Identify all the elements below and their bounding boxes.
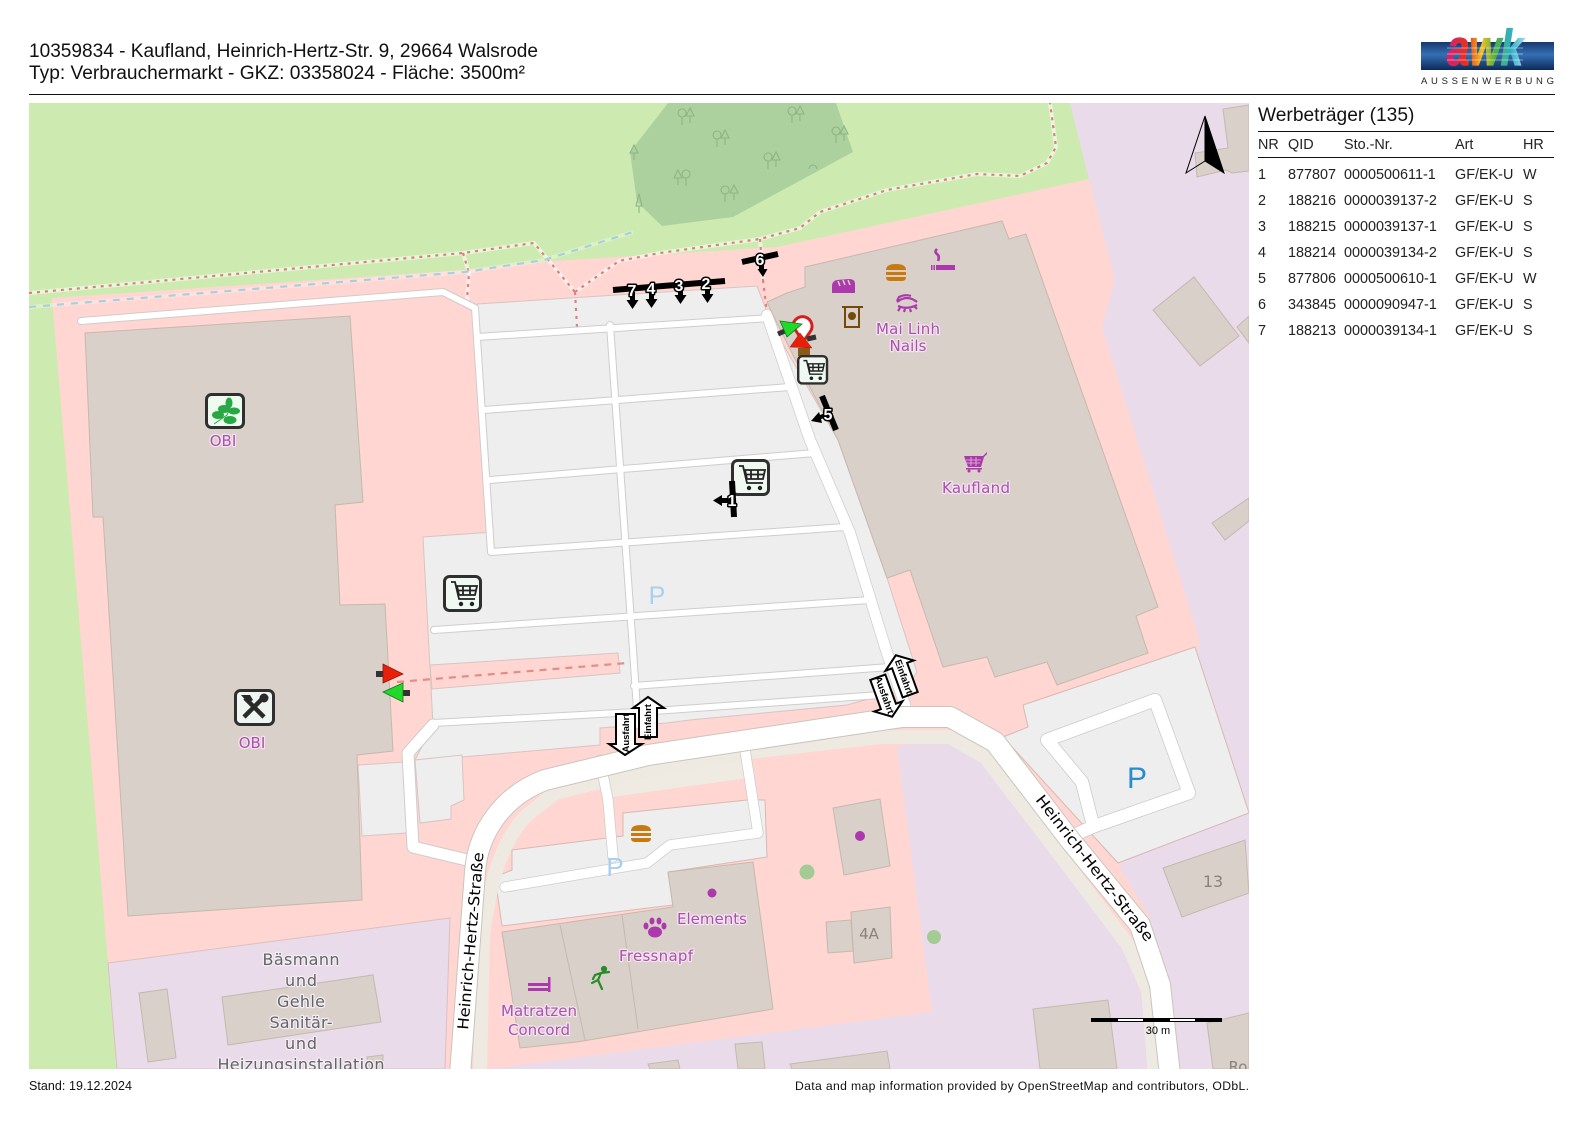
row 6: 343845 — [1288, 297, 1336, 313]
pin — [793, 317, 812, 342]
footer: date: Stand: 19.12.2024 — [29, 1079, 132, 1093]
icon: garden marker OBI — [206, 394, 244, 428]
labels: OSM places: Bäsmann — [262, 950, 340, 969]
row 1: 1 — [1258, 167, 1266, 183]
green grass area north — [29, 103, 1089, 300]
main road — [460, 717, 1170, 1075]
legend header row: Art — [1455, 137, 1473, 153]
arrow: Ausfahrt south: Ausfahrt — [621, 713, 632, 753]
row 2: S — [1523, 193, 1533, 209]
icon: bread — [832, 279, 855, 293]
building: Kaufland — [767, 221, 1158, 685]
marker 1 — [713, 481, 737, 517]
icon: runner — [592, 967, 609, 989]
row 6 — [1258, 297, 1533, 313]
icon: ATM — [842, 307, 863, 327]
row 7: 188213 — [1288, 323, 1336, 339]
icon: cart marker small — [798, 356, 827, 383]
row 1: GF/EK-U — [1455, 167, 1513, 183]
marker 5: 5 — [824, 407, 833, 424]
row 2: 2 — [1258, 193, 1266, 209]
row 4: 4 — [1258, 245, 1266, 261]
row 1: W — [1523, 167, 1537, 183]
row 4: 188214 — [1288, 245, 1336, 261]
marker 5 — [811, 396, 836, 430]
row 3: 188215 — [1288, 219, 1336, 235]
labels: OSM places: Matratzen — [501, 1002, 577, 1020]
row 6: S — [1523, 297, 1533, 313]
arrow: Ausfahrt east: Ausfahrt — [872, 675, 896, 716]
lavender area southwest — [108, 918, 450, 1069]
row 5 — [1258, 271, 1537, 287]
labels: OSM places: Heizungsinstallation — [218, 1055, 384, 1074]
parking labels: P — [649, 582, 665, 610]
marker bar 7-4-3-2 — [613, 281, 725, 290]
parking labels — [606, 582, 1147, 882]
labels: OSM places: und — [285, 1034, 317, 1053]
icon: burger — [886, 264, 906, 281]
row 5: 5 — [1258, 271, 1266, 287]
red triangle — [790, 333, 816, 348]
row 5: 0000500610-1 — [1344, 271, 1437, 287]
parking east — [1003, 647, 1249, 863]
legend header row: HR — [1523, 137, 1544, 153]
map — [29, 103, 1249, 1076]
logo: awk Aussenwerbung — [1421, 20, 1554, 87]
parking labels: P — [606, 852, 624, 882]
green triangle west — [383, 683, 410, 702]
advertising site markers — [613, 252, 836, 517]
icon: paw — [644, 918, 666, 938]
icon: purple cart — [964, 452, 987, 472]
sidewalk block between service roads — [611, 760, 744, 797]
row 3 — [1258, 219, 1533, 235]
icon: cart marker large — [732, 460, 768, 494]
labels: OSM places: Sanitär- — [270, 1013, 332, 1032]
marker 4 — [646, 281, 658, 308]
row 6: GF/EK-U — [1455, 297, 1513, 313]
row 7: S — [1523, 323, 1533, 339]
row 3: 0000039137-1 — [1344, 219, 1437, 235]
row 2: 188216 — [1288, 193, 1336, 209]
labels: OSM places: Elements — [677, 910, 747, 928]
green triangle — [778, 321, 802, 337]
icon: cart marker west — [444, 576, 480, 610]
lavender area south — [480, 737, 1160, 1070]
pedestrian strip in parking — [430, 653, 620, 689]
footpaths — [29, 103, 1056, 307]
row 4 — [1258, 245, 1533, 261]
parking area main — [415, 286, 917, 760]
labels: OSM places: Nails — [890, 337, 927, 355]
logo: awk Aussenwerbung: awk — [1447, 20, 1525, 76]
icon: bed — [528, 977, 550, 992]
row 2: 0000039137-2 — [1344, 193, 1437, 209]
arrow: Ausfahrt south — [609, 713, 642, 755]
labels: OSM places: 13 — [1203, 872, 1223, 891]
labels: OSM places — [210, 320, 1247, 1076]
footpaths over parking — [575, 280, 767, 327]
row 2: GF/EK-U — [1455, 193, 1513, 209]
icon: tools marker OBI — [236, 690, 274, 724]
labels: OSM places: Fressnapf — [619, 947, 694, 965]
forest — [630, 103, 853, 226]
marker 7: 7 — [628, 283, 637, 300]
icon: dots — [708, 831, 865, 898]
icon: cigarette — [931, 249, 955, 270]
building: OBI — [85, 316, 393, 916]
icons: POI — [528, 249, 987, 992]
title: 10359834 - Kaufland, Heinrich-Hertz-Str. 9, 29664 Walsrode — [29, 41, 538, 62]
compass north arrow — [1186, 116, 1224, 173]
legend header row: Sto.-Nr. — [1344, 137, 1393, 153]
lane loop around east parking — [1047, 700, 1189, 838]
arrow: Einfahrt east: Einfahrt — [892, 658, 915, 697]
marker 3: 3 — [675, 278, 684, 295]
row 2 — [1258, 193, 1533, 209]
row 3: S — [1523, 219, 1533, 235]
row 1 — [1258, 167, 1537, 183]
labels: OSM places: Kaufland — [942, 479, 1010, 497]
row 3: GF/EK-U — [1455, 219, 1513, 235]
row 3: 3 — [1258, 219, 1266, 235]
row 5: 877806 — [1288, 271, 1336, 287]
row 6: 6 — [1258, 297, 1266, 313]
row 4: GF/EK-U — [1455, 245, 1513, 261]
legend heading: Werbeträger (135) — [1258, 105, 1414, 126]
sidewalk along main road — [480, 737, 1155, 1075]
row 1: 877807 — [1288, 167, 1336, 183]
lavender area east 2 — [1120, 820, 1249, 1069]
legend header row: QID — [1288, 137, 1314, 153]
building: south shops — [502, 862, 773, 1048]
legend panel: Werbeträger — [1258, 105, 1554, 339]
marker 6: 6 — [756, 252, 765, 269]
labels: OSM places: Mai Linh — [876, 320, 940, 338]
road label: Heinrich-Hertz-Straße east: Heinrich-Hertz-Straße — [1032, 791, 1157, 945]
marker 4: 4 — [647, 281, 656, 298]
marker 2 — [702, 276, 714, 303]
arrow: Einfahrt south — [633, 697, 664, 740]
legend header row: NR — [1258, 137, 1279, 153]
icon: eye lashes — [897, 295, 917, 312]
labels: OSM places: Gehle — [277, 992, 325, 1011]
parking blocks west — [358, 755, 464, 836]
marker 1: 1 — [728, 493, 737, 510]
row 5: GF/EK-U — [1455, 271, 1513, 287]
title: Typ: Verbrauchermarkt - GKZ: 03358024 - Fläche: 3500m² — [29, 63, 525, 84]
service lanes — [81, 292, 905, 887]
row 4: S — [1523, 245, 1533, 261]
labels: OSM places: 4A — [859, 925, 880, 943]
marker 7 — [626, 283, 638, 309]
red triangle west — [376, 664, 403, 683]
labels: OSM places: Concord — [508, 1021, 570, 1039]
arrow: Einfahrt east — [882, 650, 924, 700]
arrow: Einfahrt south: Einfahrt — [643, 703, 654, 740]
row 5: W — [1523, 271, 1537, 287]
row 6: 0000090947-1 — [1344, 297, 1437, 313]
marker 3 — [674, 278, 686, 304]
parking south — [495, 800, 767, 926]
labels: OSM places: und — [285, 971, 317, 990]
green grass strip west — [29, 298, 117, 1069]
footer: attribution: Data and map information provided by OpenStreetMap and contributors, ODbL. — [795, 1079, 1249, 1093]
other buildings — [139, 105, 1249, 1069]
row 7: 0000039134-1 — [1344, 323, 1437, 339]
title — [29, 41, 538, 84]
row 4: 0000039134-2 — [1344, 245, 1437, 261]
scale bar: 30 m — [1146, 1025, 1170, 1037]
entrance marker pin and triangles — [778, 317, 816, 356]
arrow: Ausfahrt east — [864, 672, 906, 722]
scale bar — [1091, 1018, 1222, 1037]
row 7 — [1258, 323, 1533, 339]
marker 2: 2 — [702, 276, 711, 293]
row 7: 7 — [1258, 323, 1266, 339]
labels: OSM places: OBI — [239, 734, 265, 752]
tree dots — [800, 864, 941, 944]
road label: Heinrich-Hertz-Straße west: Heinrich-Hertz-Straße — [454, 851, 487, 1030]
marker 6 — [742, 252, 778, 277]
logo: awk Aussenwerbung: AUSSENWERBUNG — [1421, 76, 1554, 87]
legend header row — [1258, 137, 1544, 153]
lavender area east — [1070, 103, 1249, 868]
row 1: 0000500611-1 — [1344, 167, 1436, 183]
labels: OSM places: OBI — [210, 432, 236, 450]
parking labels: P — [1127, 762, 1147, 795]
icon: burger south — [631, 825, 651, 842]
row 7: GF/EK-U — [1455, 323, 1513, 339]
buildings — [85, 105, 1249, 1069]
labels: OSM places: Ro — [1229, 1058, 1247, 1076]
